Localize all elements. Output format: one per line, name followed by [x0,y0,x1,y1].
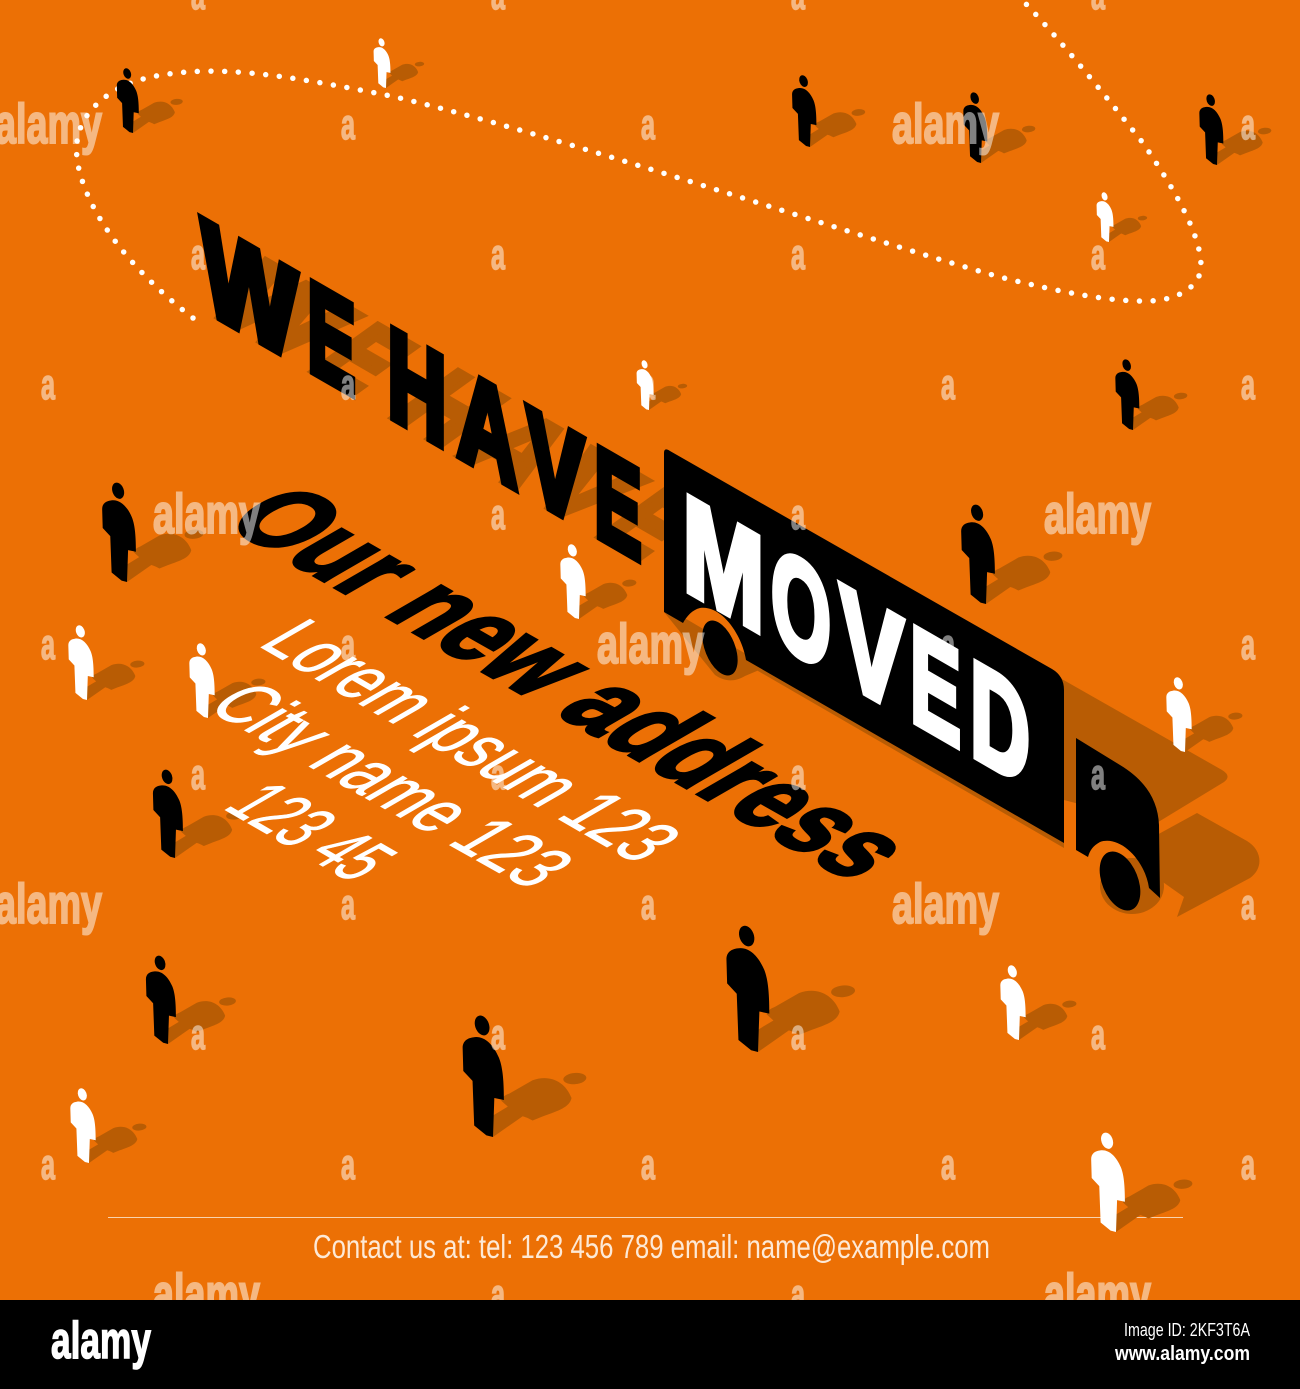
heading: we have: H [388,300,446,476]
watermarks: alamy [153,482,260,545]
watermarks: a [641,361,656,409]
watermarks: a [791,1271,806,1319]
heading: we have: W [202,192,297,390]
truck cargo box [664,449,1064,843]
heading shadow: V [506,434,668,542]
address line 2: City name 123 [190,671,594,899]
dotted route line [77,0,1201,318]
person: white, left of address [189,642,266,718]
watermarks: a [641,101,656,149]
watermarks: a [491,231,506,279]
watermarks: a [341,361,356,409]
watermarks: a [341,621,356,669]
truck front wheel [1092,846,1148,916]
watermarks: alamy [1044,1262,1151,1325]
watermarks: alamy [153,1262,260,1325]
heading: moved [682,464,1030,818]
person: black, top right 2 [1199,93,1272,165]
heading: moved: E [910,596,961,778]
footer logo: alamy [51,1312,151,1370]
person: white, bottom left [70,1087,147,1163]
subheading: our new address: Our new address [200,470,944,895]
watermarks: a [791,491,806,539]
heading: we have: E [594,419,642,589]
watermarks: a [191,751,206,799]
watermarks: a [341,1141,356,1189]
watermarks: a [491,1011,506,1059]
truck [664,449,1160,916]
person: white, centre [637,359,687,410]
watermarks: a [1241,101,1256,149]
person: black, right [1115,358,1188,430]
watermarks: a [941,1141,956,1189]
heading shadow: E [574,473,726,576]
truck shadow [664,606,1259,917]
watermarks: a [1241,1141,1256,1189]
watermarks: a [491,751,506,799]
footer divider [108,1217,1183,1218]
person: black, right of truck [961,503,1063,604]
watermarks: a [641,1141,656,1189]
heading: moved: M [682,464,764,665]
watermarks: a [1091,231,1106,279]
person: white, bottom right [1091,1131,1193,1232]
person: black, left middle [153,768,243,858]
heading: we have: V [526,380,584,555]
watermarks: a [491,491,506,539]
person: black, lower middle [463,1013,587,1137]
watermarks: a [1241,361,1256,409]
heading shadow [181,247,726,576]
watermarks: alamy [892,92,999,155]
person: black, lower left [146,954,236,1044]
person: white, top [374,37,424,88]
watermarks: alamy [597,612,704,675]
heading shadow: E [287,308,440,411]
heading: we have [202,192,642,589]
watermarks: a [941,361,956,409]
watermarks: a [191,1011,206,1059]
watermarks: a [41,361,56,409]
watermarks: a [1241,621,1256,669]
address line 1: Lorem ipsum 123 [242,608,701,873]
truck cab [1076,738,1160,898]
watermarks: alamy [1044,482,1151,545]
person: black, top centre [792,74,865,147]
person: black, lower centre large [726,924,856,1052]
contact line: Contact us at: tel: 123 456 789 email: name@example.com [313,1228,990,1265]
address text [190,608,701,899]
watermarks: a [791,231,806,279]
watermarks: a [41,621,56,669]
person: black, top left [117,67,183,133]
website: www.alamy.com [1114,1343,1250,1365]
person: black, left [102,481,204,582]
heading: moved: V [840,555,904,745]
watermarks: a [641,881,656,929]
heading: moved: D [970,630,1030,818]
person: white, below heading [560,543,637,619]
watermarks: a [791,1011,806,1059]
watermarks: a [191,231,206,279]
image id: Image ID: 2KF3T6A [1124,1320,1250,1340]
watermarks: a [1091,751,1106,799]
person: white, far left [68,624,145,700]
watermarks: a [41,1141,56,1189]
watermarks: a [341,101,356,149]
person: white, lower right [1000,964,1077,1040]
heading: moved: O [771,516,831,703]
watermarks: a [941,621,956,669]
truck rear wheel [695,615,745,681]
heading shadow: H [367,354,531,463]
person: black, top right 1 [963,91,1036,163]
black footer bar [0,1300,1300,1389]
watermarks: a [491,1271,506,1319]
heading: we have: A [458,340,517,517]
watermarks: a [341,881,356,929]
person: white, top right [1097,191,1147,242]
watermarks: a [1091,1011,1106,1059]
heading: we have: E [308,253,355,424]
heading shadow: W [181,247,381,377]
watermarks: a [791,751,806,799]
heading shadow: A [437,394,602,504]
watermarks: a [1241,881,1256,929]
address line 3: 123 45 [207,771,416,892]
person: white, right of truck [1166,676,1243,752]
watermarks: alamy [892,872,999,935]
